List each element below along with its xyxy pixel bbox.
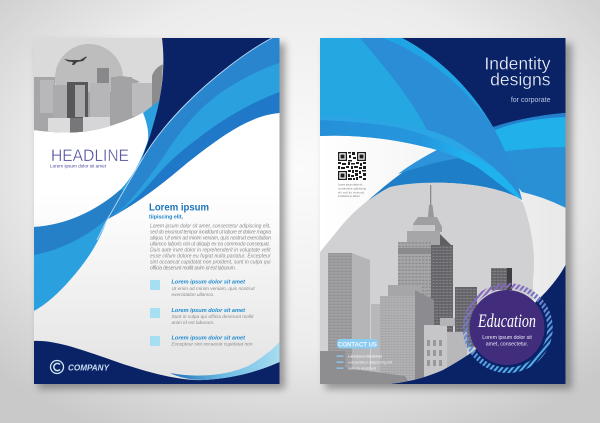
list item 2: Lorem ipsum dolor sit amet [172, 308, 246, 314]
body paragraph: Duis aute irure dolor in reprehenderit in voluptate velit [150, 248, 271, 254]
building: dark small block [455, 268, 512, 347]
list item 3 [150, 336, 253, 348]
headline: HEADLINE [51, 147, 129, 165]
body paragraph: sint occaecat cupidatat non proident, sunt in culpa qui [150, 260, 271, 266]
swoosh: middle band [112, 63, 280, 216]
contact us button: CONTACT US [338, 342, 377, 348]
bright stripe [383, 38, 493, 127]
education badge: Lorem ipsum dolor sit [482, 335, 532, 341]
list item 2 [150, 308, 254, 324]
list item 3: Excepteur sint occaecat cupidatat non [172, 342, 253, 348]
blue mass: darker wedge [320, 38, 522, 200]
body paragraph: ullamco laboris nisi ut aliquip ex ea commodo consequat. [150, 242, 270, 248]
education badge: amet, consectetur. [486, 342, 528, 348]
QR caption: Lorem ipsum dolor sit [338, 182, 362, 186]
education badge [465, 286, 550, 370]
contact lines: sed do eiusmod [348, 366, 376, 370]
body paragraph: sed do eiusmod tempor incididunt ut labore et dolore magna [150, 230, 271, 236]
white highlight line [97, 38, 272, 240]
section subheading: tiipiscing elit, [149, 215, 183, 221]
body paragraph [150, 224, 271, 271]
navy corner panel [402, 38, 566, 127]
cover title [486, 56, 550, 89]
list item 1: exercitation ullamco. [172, 292, 214, 298]
building: central tower [398, 185, 453, 365]
city skyline [320, 180, 535, 385]
company name: COMPANY [68, 363, 110, 372]
list item 1 [150, 280, 255, 298]
QR caption: incididunt ut labore [338, 194, 361, 198]
list item 1: Lorem ipsum dolor sit amet [172, 280, 246, 286]
body paragraph: Lorem ipsum dolor sit amet, consectetur adipiscing elit, [150, 224, 270, 230]
QR caption: consectetur adipiscing [338, 186, 367, 190]
list item 2: anim id est laborum. [172, 320, 214, 326]
building: foreground block [371, 285, 467, 385]
education badge: Education [477, 311, 536, 332]
body paragraph: officia deserunt mollit anim id est laborum. [150, 265, 236, 271]
headline subtitle: Lorem ipsum dolor sit amet [50, 164, 107, 168]
contact lines [336, 354, 393, 370]
contact us button [337, 339, 378, 348]
right thin band [493, 113, 566, 130]
swoosh: lower band [110, 92, 280, 217]
body paragraph: aliqua. Ut enim ad minim veniam, quis nostrud exercitation [150, 236, 271, 242]
list item 1: Ut enim ad minim veniam, quis nostrud [172, 286, 255, 292]
navy top panel [140, 38, 276, 163]
list item 2: Sunt in culpa qui officia deserunt mollit [172, 314, 254, 320]
left swoosh: dark band [34, 190, 128, 255]
left swoosh: light band [34, 100, 165, 311]
QR caption: elit sed do eiusmod [338, 190, 365, 194]
main bright panel [320, 38, 427, 130]
contact lines: consectetur adipiscing elit [348, 360, 393, 364]
city photo [34, 38, 164, 138]
list item 3: Lorem ipsum dolor sit amet [172, 336, 246, 342]
footer wave [34, 341, 280, 384]
curved band highlight [320, 115, 493, 167]
cover title: designs [490, 70, 551, 90]
curved band [320, 130, 522, 200]
panel: right brochure page [320, 38, 566, 385]
cover subtitle: for corporate [511, 97, 551, 104]
icon: airplane [64, 56, 87, 65]
ground buildings [320, 351, 410, 384]
contact lines: Lorem ipsum dolor sit amet [348, 354, 383, 358]
building: left tower [328, 253, 370, 373]
QR code [338, 152, 366, 180]
icon: company logo [50, 360, 64, 374]
lower wedge [365, 150, 522, 203]
panel: left brochure page [34, 38, 280, 384]
right dark band [505, 147, 566, 208]
swoosh: top band [107, 38, 280, 220]
navy bottom panel [390, 264, 566, 384]
lower wedge highlight [398, 150, 458, 174]
QR caption [338, 184, 366, 197]
right light band [480, 110, 566, 152]
footer light wave [170, 342, 280, 380]
cover title: Indentity [484, 54, 551, 74]
section heading: Lorem ipsum [149, 202, 209, 214]
windows: front block [427, 340, 442, 366]
body paragraph: esse cillum dolore eu fugiat nulla pariatur. Excepteur [150, 254, 271, 260]
